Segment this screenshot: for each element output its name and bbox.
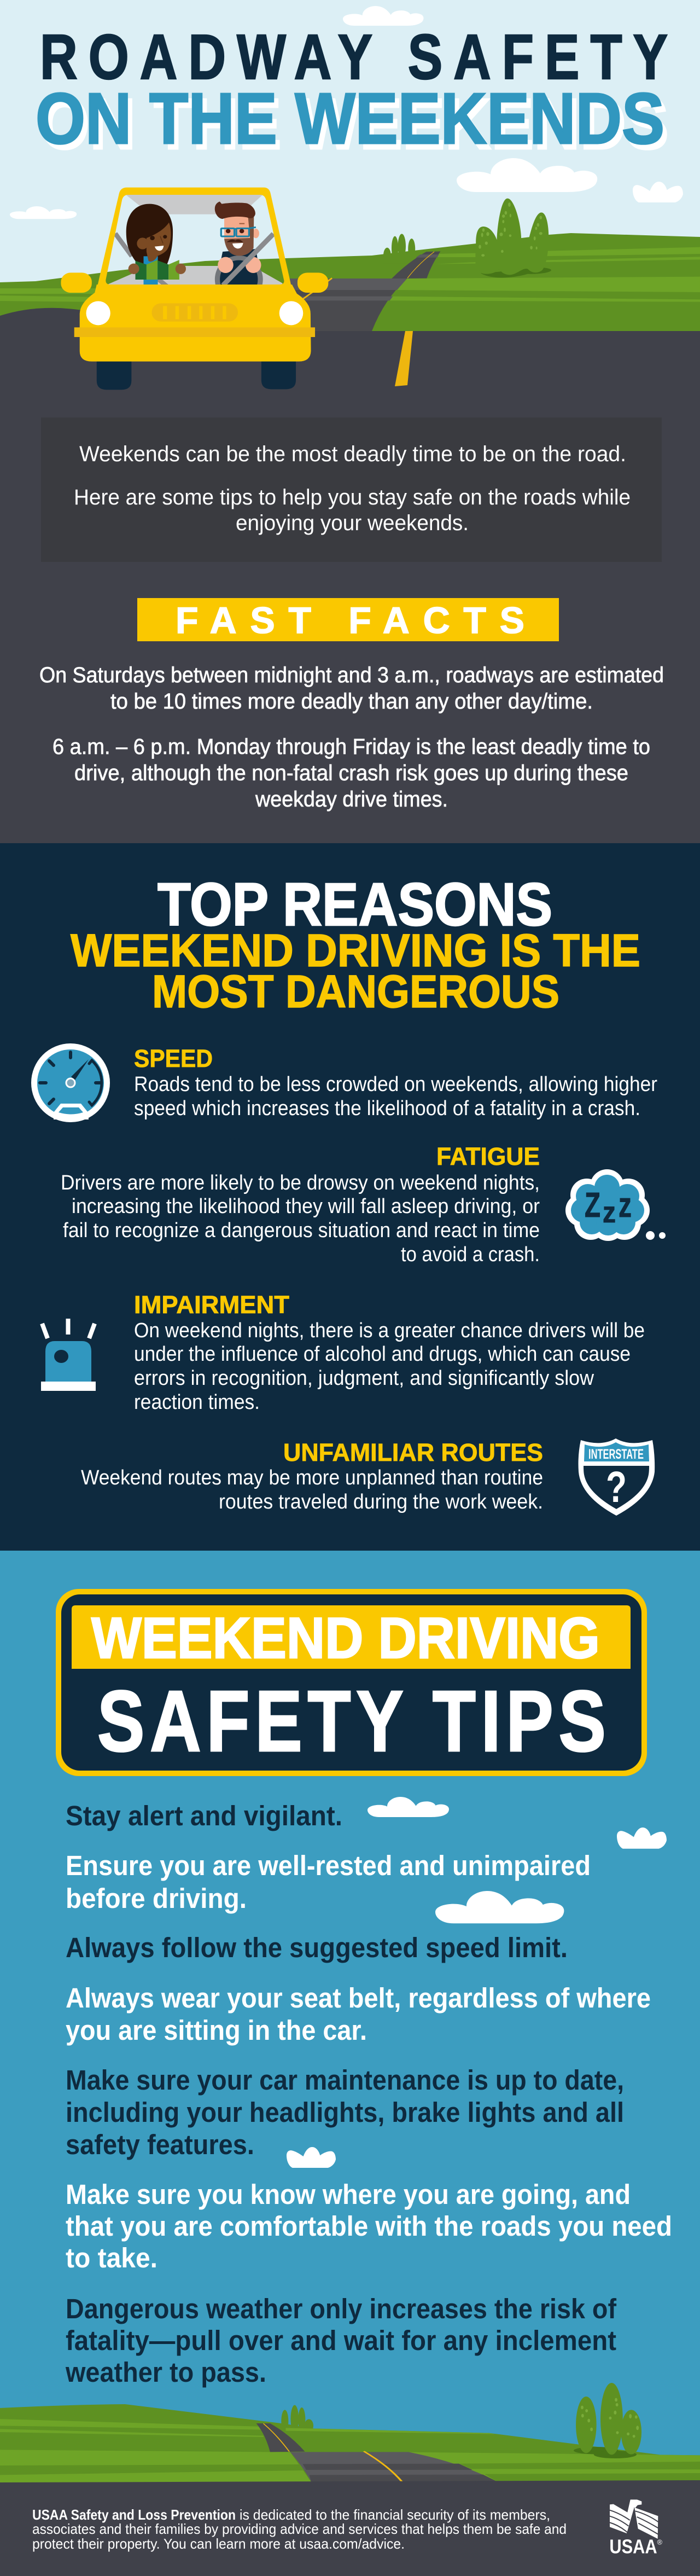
tip: maintenance <box>66 2064 624 2160</box>
tip: know where you are going: that you are comfortable with the roads you need <box>66 2211 672 2242</box>
reason: unfamiliar routes: Weekend routes may be more unplanned than routine <box>81 1466 543 1489</box>
tip: maintenance: Make sure your car maintenance is up to date, <box>66 2064 624 2096</box>
reason: fatigue: increasing the likelihood they will fall asleep driving, or <box>72 1195 540 1218</box>
tip: dangerous weather <box>65 2293 617 2388</box>
car body <box>80 285 311 362</box>
tip: seat belt: you are sitting in the car. <box>66 2015 367 2046</box>
icon: interstate shield: ? <box>606 1463 627 1511</box>
reason: impairment: IMPAIRMENT <box>134 1291 289 1319</box>
shadow under trees <box>481 267 551 277</box>
fast fact: Saturdays: to be 10 times more deadly than any other day/time. <box>110 689 593 713</box>
footer text <box>32 2507 567 2552</box>
fast fact: weekdays: 6 a.m. – 6 p.m. Monday through Friday is the least deadly time to <box>52 735 650 759</box>
fast fact: weekdays: weekday drive times. <box>255 787 448 811</box>
tip: know where you are going: Make sure you know where you are going, and <box>66 2179 631 2210</box>
tip: dangerous weather: weather to pass. <box>65 2357 266 2388</box>
back hill <box>0 2404 700 2482</box>
icon: sleep cloud <box>565 1169 666 1241</box>
seat belt: passenger <box>115 234 167 286</box>
icon: interstate shield <box>579 1438 655 1516</box>
tip: well-rested: Ensure you are well-rested and unimpaired <box>66 1850 591 1881</box>
reason: fatigue: FATIGUE <box>436 1142 540 1170</box>
footer text: USAA Safety and Loss Prevention <box>32 2507 236 2523</box>
front field <box>372 277 700 331</box>
sign: weekend driving safety tips: SAFETY TIPS <box>97 1673 606 1769</box>
icon: sleep cloud: Z <box>585 1185 600 1225</box>
man driver <box>214 201 265 303</box>
footer text: is dedicated to the financial security of its members, <box>240 2507 550 2523</box>
tip: seat belt: Always wear your seat belt, regardless of where <box>66 1982 651 2014</box>
intro paragraph <box>74 485 631 535</box>
heading: top reasons: TOP REASONS <box>158 871 552 938</box>
intro paragraph: Here are some tips to help you stay safe on the roads while <box>74 485 631 509</box>
reason: impairment <box>134 1291 645 1414</box>
dashboard <box>107 266 283 285</box>
cloud: small far right <box>633 182 683 202</box>
reason: unfamiliar routes: routes traveled during the work week. <box>219 1490 543 1513</box>
trees <box>576 2383 641 2455</box>
bumper <box>74 327 315 337</box>
icon: speedometer <box>31 1043 110 1122</box>
headlights <box>86 301 110 325</box>
logo: USAA: USAA <box>609 2536 657 2558</box>
lane marker <box>395 331 413 386</box>
windshield frame <box>97 188 292 289</box>
tip: maintenance: safety features. <box>66 2129 254 2160</box>
cloud: small left <box>10 206 77 219</box>
right landscape <box>284 199 700 331</box>
cloud: tips D <box>287 2147 336 2168</box>
tip: know where you are going: to take. <box>66 2242 158 2273</box>
reason: fatigue <box>61 1142 540 1266</box>
fast fact: Saturdays: On Saturdays between midnight and 3 a.m., roadways are estimated <box>39 663 664 687</box>
mirrors <box>61 272 92 293</box>
sign: weekend driving safety tips: WEEKEND DRIVING <box>91 1606 600 1670</box>
fast fact: weekdays <box>52 735 650 811</box>
title line 1: ROADWAY SAFETY <box>40 22 668 92</box>
reason: impairment: errors in recognition, judgment, and significantly slow <box>134 1367 594 1390</box>
cloud: large right <box>457 158 597 192</box>
panel: top reasons <box>0 843 700 1551</box>
cloud: tips C <box>435 1891 564 1923</box>
grille <box>151 303 238 322</box>
small bushes <box>281 2405 313 2433</box>
illustration: yellow car with two passengers <box>61 188 332 390</box>
wheels <box>97 357 296 390</box>
heading: top reasons <box>71 871 640 1017</box>
tip: know where you are going <box>66 2179 672 2273</box>
near road <box>290 2451 497 2482</box>
heading: top reasons: WEEKEND DRIVING IS THE <box>71 925 640 976</box>
footer text: associates and their families by providing advice and services that helps them be safe and <box>32 2521 567 2537</box>
intro paragraph: enjoying your weekends. <box>236 511 469 535</box>
field stripes <box>435 247 700 264</box>
icon: interstate shield: INTERSTATE <box>588 1447 644 1462</box>
tip: maintenance: including your headlights, brake lights and all <box>66 2097 624 2128</box>
cloud: tips B <box>617 1827 667 1849</box>
panel: hero scene <box>0 0 700 339</box>
reason: impairment: reaction times. <box>134 1391 260 1414</box>
trees <box>476 199 549 275</box>
tip: well-rested <box>66 1850 591 1914</box>
intro line: Weekends can be the most deadly time to be on the road. <box>79 442 626 466</box>
cloud: tips A <box>368 1797 449 1817</box>
sign: weekend driving safety tips <box>56 1589 647 1776</box>
woman passenger <box>126 204 186 285</box>
reason: speed <box>134 1045 657 1120</box>
reason: impairment: under the influence of alcohol and drugs, which can cause <box>134 1343 631 1366</box>
tip: speed limit: Always follow the suggested speed limit. <box>66 1932 568 1963</box>
reason: speed: speed which increases the likelihood of a fatality in a crash. <box>134 1097 640 1120</box>
panel: intro text box <box>41 417 662 562</box>
icon: siren <box>41 1319 96 1391</box>
reason: unfamiliar routes <box>81 1438 543 1513</box>
tip: dangerous weather: Dangerous weather only increases the risk of <box>66 2293 617 2324</box>
interior roof <box>126 195 262 214</box>
tip: seat belt <box>66 1982 651 2046</box>
illustration: bottom landscape <box>0 2383 700 2482</box>
fast fact: weekdays: drive, although the non-fatal crash risk goes up during these <box>74 761 628 785</box>
tip: stay alert: Stay alert and vigilant. <box>66 1800 342 1831</box>
logo: USAA: ® <box>657 2539 663 2546</box>
left field stripes <box>0 288 104 302</box>
back hill <box>0 233 700 332</box>
tip: dangerous weather: fatality—pull over and wait for any inclement <box>66 2325 616 2356</box>
reason: speed: SPEED <box>134 1045 213 1072</box>
panel: safety tips <box>0 1551 700 2486</box>
mid road <box>284 279 407 331</box>
far road <box>392 251 441 279</box>
panel: footer <box>0 2480 700 2576</box>
logo: USAA <box>609 2499 663 2558</box>
title <box>36 22 669 164</box>
reason: speed: Roads tend to be less crowded on weekends, allowing higher <box>134 1073 657 1096</box>
shadow under trees <box>574 2447 637 2458</box>
left front field <box>0 2450 311 2482</box>
seat belt: driver <box>223 234 273 285</box>
tip: well-rested: before driving. <box>66 1883 247 1914</box>
right front field <box>409 2452 700 2481</box>
icon: sleep cloud: z <box>603 1196 616 1229</box>
icon: sleep cloud: z <box>619 1185 632 1225</box>
panel: road background <box>0 331 700 843</box>
reason: unfamiliar routes: UNFAMILIAR ROUTES <box>283 1438 543 1466</box>
far road <box>256 2423 305 2452</box>
fast facts banner: FAST FACTS <box>176 600 524 641</box>
heading: top reasons: MOST DANGEROUS <box>152 966 559 1017</box>
cloud: top center <box>343 6 423 26</box>
reason: fatigue: to avoid a crash. <box>401 1243 540 1266</box>
reason: impairment: On weekend nights, there is a greater chance drivers will be <box>134 1319 645 1342</box>
fast fact: Saturdays <box>39 663 664 713</box>
road hump left <box>0 308 82 339</box>
lane line behind car <box>303 278 332 299</box>
small bushes <box>383 234 415 264</box>
reason: fatigue: Drivers are more likely to be drowsy on weekend nights, <box>61 1171 540 1194</box>
footer text: protect their property. You can learn more at usaa.com/advice. <box>32 2536 405 2552</box>
hill stripes <box>0 2419 495 2437</box>
reason: fatigue: fail to recognize a dangerous situation and react in time <box>63 1219 540 1242</box>
